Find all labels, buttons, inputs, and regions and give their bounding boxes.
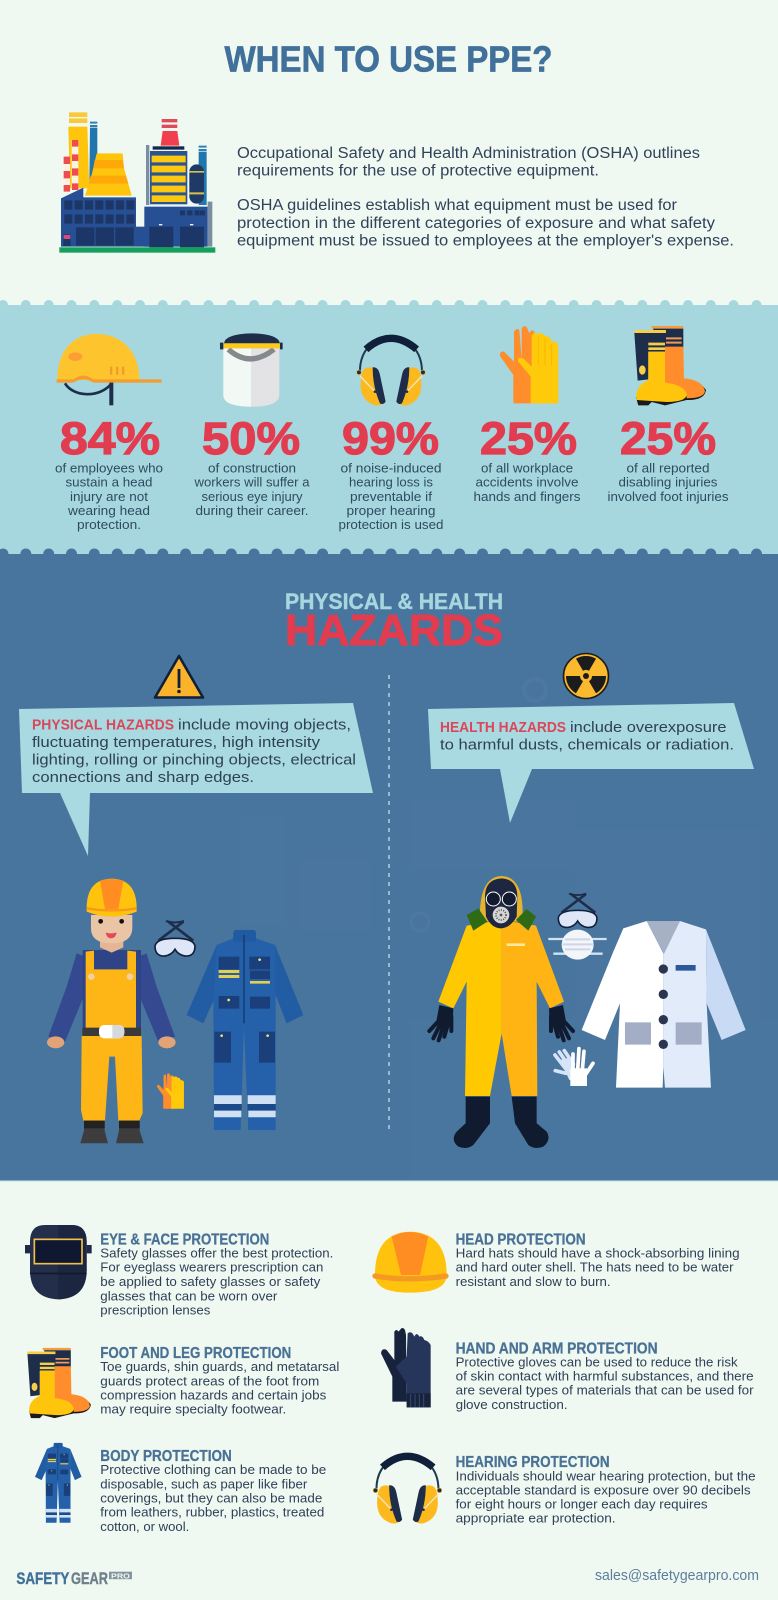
icon: hard hat front xyxy=(375,1232,447,1293)
panel: hand and arm protection: HAND AND ARM PROTECTION xyxy=(456,1340,658,1358)
intro paragraph xyxy=(237,145,734,249)
stat: 84%: 84% xyxy=(60,413,160,464)
panel: hand and arm protection: of skin contact with harmful substances, and there xyxy=(456,1368,754,1383)
stat: 99%: protection is used xyxy=(338,517,444,532)
panel: hazards section xyxy=(0,548,778,1180)
panel: hand and arm protection xyxy=(381,1328,754,1412)
heading: physical & health hazards: HAZARDS xyxy=(285,606,503,655)
panel: head protection: HEAD PROTECTION xyxy=(456,1232,586,1248)
panel: foot and leg protection: compression hazards and certain jobs xyxy=(100,1387,327,1402)
panel: body protection xyxy=(35,1443,326,1534)
stat: 25% feet: of all reported xyxy=(626,460,710,476)
panel: head protection: resistant and slow to burn. xyxy=(456,1274,611,1289)
panel: foot and leg protection: guards protect areas of the foot from xyxy=(100,1373,319,1388)
icon: warning triangle xyxy=(155,656,203,698)
panel: hearing protection: appropriate ear protection. xyxy=(456,1511,616,1526)
figure: lab coat xyxy=(582,921,746,1088)
stat: 25% hands: of all workplace xyxy=(481,460,573,476)
icon: ear muffs small xyxy=(373,1455,442,1524)
stat: 25% hands: hands and fingers xyxy=(474,489,581,504)
panel: hearing protection: HEARING PROTECTION xyxy=(456,1454,610,1471)
intro paragraph: OSHA guidelines establish what equipment must be used for xyxy=(237,197,677,214)
callout: physical hazards: connections and sharp edges. xyxy=(32,769,254,786)
panel: body protection: from leathers, rubber, plastics, treated xyxy=(100,1505,324,1520)
icon: gloves xyxy=(500,326,558,403)
panel: foot and leg protection: may require specialty footwear. xyxy=(100,1402,286,1417)
intro paragraph: protection in the different categories of exposure and what safety xyxy=(237,215,715,232)
callout: health hazards: include overexposure xyxy=(570,719,726,736)
panel: statistics band xyxy=(0,300,778,555)
figure: hazmat suit xyxy=(429,876,573,1148)
icon: face shield xyxy=(220,333,283,407)
panel: body protection: cotton, or wool. xyxy=(100,1519,189,1534)
icon: dust mask xyxy=(548,930,607,960)
stat: 84%: injury are not xyxy=(70,489,148,504)
callout: physical hazards: include moving objects, xyxy=(178,716,351,734)
icon: hard hat xyxy=(57,334,162,405)
callout: health hazards xyxy=(428,703,754,823)
stat: 99%: of noise-induced xyxy=(340,460,442,476)
panel: body protection: coverings, but they can also be made xyxy=(100,1490,322,1505)
panel: eye & face protection: For eyeglass wearers prescription can xyxy=(100,1260,323,1275)
stat: 84%: sustain a head xyxy=(66,475,152,490)
panel: hearing protection: Individuals should wear hearing protection, but the xyxy=(456,1468,756,1483)
stat: 25% feet: disabling injuries xyxy=(618,475,718,490)
stat: 99%: 99% xyxy=(342,413,439,464)
panel: hand and arm protection: Protective gloves can be used to reduce the risk xyxy=(456,1354,738,1369)
panel: hand and arm protection: are several types of materials that can be used for xyxy=(456,1383,754,1398)
stat: 50%: workers will suffer a xyxy=(193,475,310,490)
panel: foot and leg protection: FOOT AND LEG PROTECTION xyxy=(100,1345,291,1362)
panel: eye & face protection: be applied to safety glasses or safety xyxy=(100,1274,321,1289)
panel: body protection: disposable, such as paper like fiber xyxy=(100,1476,308,1491)
stat: 99%: proper hearing xyxy=(346,503,436,518)
stat: 84%: protection. xyxy=(77,517,141,532)
footer email: sales@safetygearpro.com xyxy=(595,1567,759,1584)
panel: hearing protection: acceptable standard is exposure over 90 decibels xyxy=(456,1482,751,1497)
panel: body protection: Protective clothing can be made to be xyxy=(100,1462,326,1477)
icon: welding mask xyxy=(25,1225,92,1299)
panel: eye & face protection xyxy=(25,1225,333,1317)
panel: eye & face protection: prescription lenses xyxy=(100,1302,211,1317)
stat: 50%: serious eye injury xyxy=(202,489,303,504)
icon: radiation symbol xyxy=(564,654,608,698)
stat: 99%: preventable if xyxy=(350,489,432,504)
title: WHEN TO USE PPE? xyxy=(224,38,552,80)
footer logo: PRO xyxy=(111,1571,130,1580)
panel: eye & face protection: Safety glasses offer the best protection. xyxy=(100,1245,333,1260)
callout: physical hazards: fluctuating temperatures, high intensity xyxy=(32,734,321,751)
stat: 84%: wearing head xyxy=(67,503,150,518)
icon: boots xyxy=(634,326,706,405)
icon: boots small xyxy=(27,1348,91,1418)
panel: head protection xyxy=(375,1232,740,1293)
callout: physical hazards xyxy=(19,703,373,856)
icon: goggles (right) xyxy=(558,894,597,927)
intro paragraph: requirements for the use of protective equipment. xyxy=(237,162,599,179)
stat: 50%: 50% xyxy=(202,413,300,464)
panel: hearing protection: for eight hours or longer each day requires xyxy=(456,1496,708,1511)
callout: physical hazards: PHYSICAL HAZARDS xyxy=(32,716,174,734)
callout: health hazards: HEALTH HAZARDS xyxy=(440,719,566,736)
stat: 50%: during their career. xyxy=(196,503,308,518)
stat: 84% xyxy=(55,413,163,532)
heading: physical & health hazards: PHYSICAL & HEALTH xyxy=(285,589,503,614)
panel: hearing protection xyxy=(373,1454,756,1526)
icon: white gloves xyxy=(555,1049,593,1086)
footer logo xyxy=(16,1569,132,1588)
figure: coverall xyxy=(187,930,303,1130)
icon: goggles (left) xyxy=(155,921,195,956)
icon: dark gloves xyxy=(381,1328,431,1407)
panel: foot and leg protection xyxy=(27,1345,339,1418)
footer logo: SAFETY xyxy=(16,1569,70,1588)
footer logo: GEAR xyxy=(71,1569,108,1588)
stat: 25% hands xyxy=(474,413,581,504)
panel: head protection: and hard outer shell. The hats need to be water xyxy=(456,1260,734,1275)
panel: eye & face protection: glasses that can be worn over xyxy=(100,1288,278,1303)
stat: 84%: of employees who xyxy=(55,460,163,476)
icon: ear muffs xyxy=(357,337,425,406)
stat: 25% hands: accidents involve xyxy=(476,475,578,490)
stat: 99% xyxy=(338,413,444,532)
stat: 99%: hearing loss is xyxy=(349,475,433,490)
panel: foot and leg protection: Toe guards, shin guards, and metatarsal xyxy=(100,1359,339,1374)
callout: physical hazards: lighting, rolling or pinching objects, electrical xyxy=(32,752,356,768)
intro paragraph: equipment must be issued to employees at the employer's expense. xyxy=(237,232,734,249)
intro paragraph: Occupational Safety and Health Administration (OSHA) outlines xyxy=(237,145,700,162)
panel: body protection: BODY PROTECTION xyxy=(100,1448,232,1465)
stat: 25% feet: involved foot injuries xyxy=(608,489,729,504)
icon: orange gloves xyxy=(157,1073,184,1109)
stat: 50% xyxy=(193,413,310,518)
stat: 25% hands: 25% xyxy=(480,413,577,464)
stat: 50%: of construction xyxy=(208,460,296,476)
panel: hand and arm protection: glove construction. xyxy=(456,1397,568,1412)
icon: coverall small xyxy=(35,1443,82,1523)
panel: eye & face protection: EYE & FACE PROTECTION xyxy=(100,1232,269,1248)
panel: head protection: Hard hats should have a shock-absorbing lining xyxy=(456,1245,740,1260)
stat: 25% feet: 25% xyxy=(620,413,716,464)
callout: health hazards: to harmful dusts, chemicals or radiation. xyxy=(440,736,734,754)
stat: 25% feet xyxy=(608,413,729,504)
icon: factory xyxy=(59,112,215,253)
figure: construction worker xyxy=(47,879,176,1143)
